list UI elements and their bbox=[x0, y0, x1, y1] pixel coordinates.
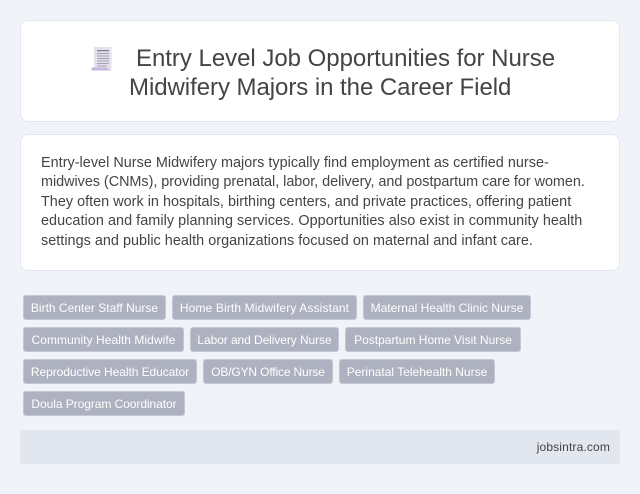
tag: Postpartum Home Visit Nurse bbox=[354, 333, 512, 347]
panel: description bbox=[20, 134, 620, 271]
text block: description: They often work in hospitals, birthing centers, and private practices, offering patient bbox=[41, 194, 571, 210]
title bbox=[129, 45, 555, 101]
footer bar bbox=[20, 430, 620, 464]
tag: Reproductive Health Educator bbox=[31, 365, 189, 379]
tag bbox=[23, 391, 185, 416]
tag bbox=[23, 295, 166, 320]
tag bbox=[203, 359, 333, 384]
tag bbox=[190, 327, 339, 352]
title: Midwifery Majors in the Career Field bbox=[129, 74, 511, 101]
tag: Labor and Delivery Nurse bbox=[197, 333, 332, 347]
footer source: jobsintra.com bbox=[537, 440, 610, 454]
tag bbox=[363, 295, 531, 320]
tag: Home Birth Midwifery Assistant bbox=[180, 301, 349, 315]
tag bbox=[23, 327, 184, 352]
tag bbox=[339, 359, 495, 384]
text block: description: education and family planning services. Opportunities also exist in community health bbox=[41, 213, 582, 229]
tag bbox=[345, 327, 521, 352]
title: Entry Level Job Opportunities for Nurse bbox=[136, 45, 555, 72]
icon: paper scroll bbox=[91, 47, 112, 70]
text block: description: midwives (CNMs), providing prenatal, labor, delivery, and postpartum care for women. bbox=[41, 174, 585, 190]
tag: Community Health Midwife bbox=[32, 333, 175, 347]
tag bbox=[172, 295, 357, 320]
panel: header bbox=[20, 20, 620, 122]
tag: Maternal Health Clinic Nurse bbox=[371, 301, 523, 315]
text block: description bbox=[41, 155, 585, 249]
text block: description: settings and public health organizations focused on maternal and infant care. bbox=[41, 233, 533, 249]
tag bbox=[23, 359, 197, 384]
tag: Perinatal Telehealth Nurse bbox=[347, 365, 487, 379]
tag: OB/GYN Office Nurse bbox=[211, 365, 325, 379]
tag: Doula Program Coordinator bbox=[31, 397, 177, 411]
tag list: job titles bbox=[23, 295, 531, 416]
text block: description: Entry-level Nurse Midwifery majors typically find employment as certified nurse- bbox=[41, 155, 549, 171]
tag: Birth Center Staff Nurse bbox=[31, 301, 158, 315]
